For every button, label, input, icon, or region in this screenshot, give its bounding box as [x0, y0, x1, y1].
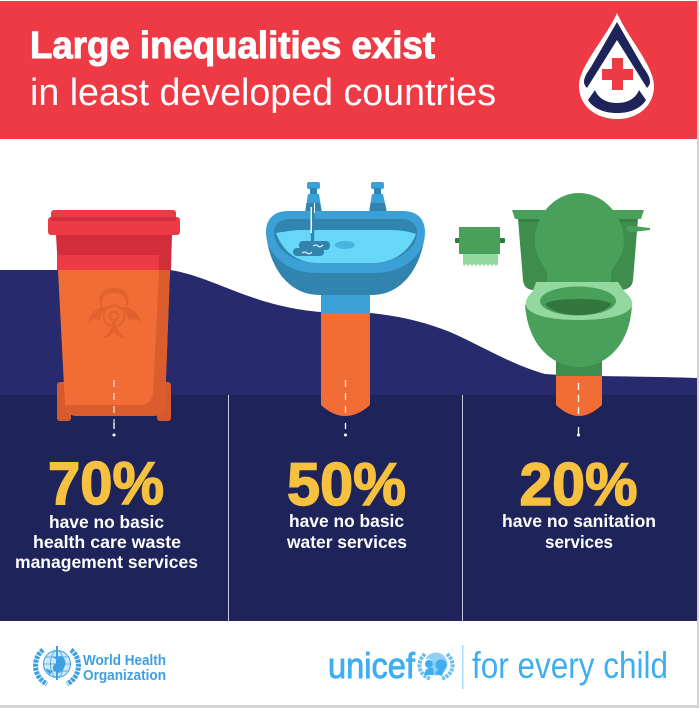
statistic: 20% sanitation services: services [545, 532, 613, 552]
icon: UNICEF emblem [419, 652, 453, 679]
organisation name [83, 653, 166, 684]
water stream and puddle [293, 203, 330, 256]
organisation name: World Health [83, 653, 166, 669]
hill background [0, 270, 697, 396]
statistic: 20% sanitation services: 20% [520, 451, 638, 518]
icon: blood drop logo [579, 13, 654, 119]
title: Large inequalities exist [30, 25, 435, 67]
icon: toilet [512, 193, 650, 416]
statistic: 50% water services: water services [286, 532, 407, 552]
statistic: 70% waste services [15, 450, 198, 572]
statistic: 70% waste services: health care waste [33, 532, 181, 552]
tap right [369, 182, 387, 213]
tap left [305, 182, 322, 213]
statistic: 70% waste services: 70% [48, 450, 164, 517]
dashed connector: basin [344, 380, 347, 436]
statistic: 50% water services: 50% [287, 451, 406, 518]
icon: WHO emblem [36, 646, 78, 684]
dark statistics panel [0, 395, 697, 621]
header banner [0, 1, 697, 139]
UNICEF logo: for every child [472, 645, 668, 686]
title [30, 25, 496, 114]
dashed connector: bin [112, 380, 116, 436]
statistic: 20% sanitation services: have no sanitation [502, 511, 656, 531]
dashed connector: toilet [577, 383, 580, 436]
icon: wash basin [266, 182, 425, 416]
UNICEF logo [328, 645, 668, 689]
title: in least developed countries [30, 72, 496, 114]
organisation name: Organization [83, 668, 166, 684]
statistic: 50% water services: have no basic [289, 511, 404, 531]
statistic: 20% sanitation services [502, 451, 656, 552]
statistic: 50% water services [286, 451, 407, 552]
icon: biohazard symbol [88, 288, 141, 338]
icon: toilet paper holder [455, 227, 505, 266]
UNICEF logo: unicef [328, 645, 416, 686]
statistic: 70% waste services: have no basic [49, 512, 164, 532]
WHO logo [36, 646, 166, 684]
statistic: 70% waste services: management services [15, 552, 198, 572]
icon: biohazard waste bin [48, 210, 180, 421]
